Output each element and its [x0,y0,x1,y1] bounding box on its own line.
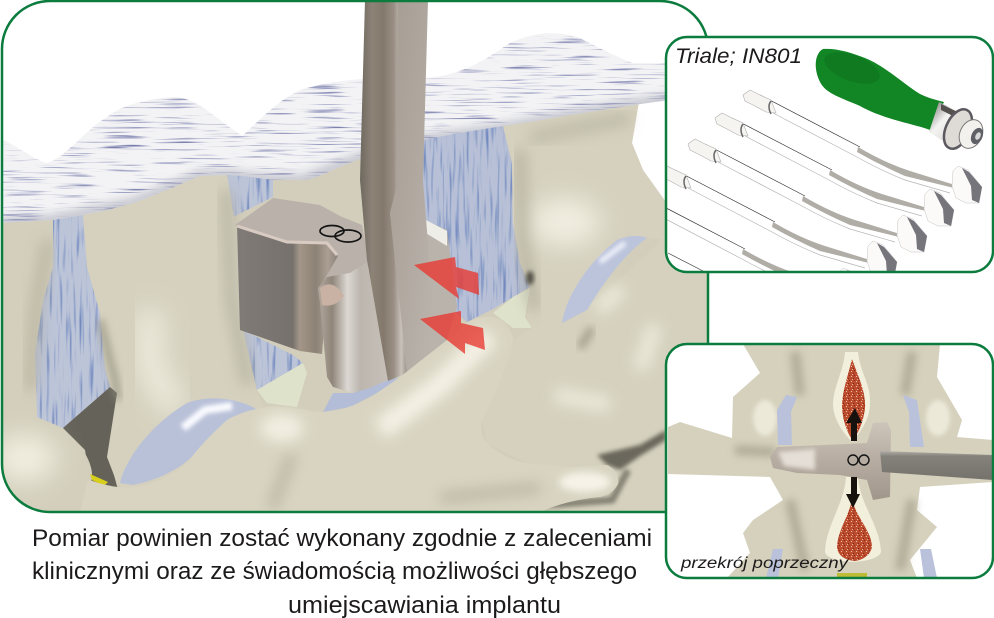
process highlight ridge [380,335,490,430]
green tissue right [493,288,532,328]
right pillar bone [503,95,668,330]
bone light knobs [753,400,777,436]
caption line 1: Pomiar powinien zostać wykonany zgodnie z zaleceniami [32,525,652,552]
blue disc lower left [120,398,258,485]
rod 5 [628,192,867,305]
blue disc top right [903,395,924,447]
vertebra bones [668,344,993,578]
main panel border [2,1,708,512]
instrument shaft right face [390,0,436,374]
corner highlight [320,284,344,306]
right notch shadow [526,271,534,285]
top cut section [833,352,870,442]
yellow fragment [90,474,108,486]
instrument shaft strip [360,0,407,381]
blue disc under implant [323,377,402,412]
inset border [666,344,993,578]
arrow down [846,477,860,508]
dark shadow below lower right bone [597,430,666,470]
caption text block [32,525,652,618]
left pillar bone [86,192,244,478]
marking 8 [320,226,361,242]
rod 2 [715,113,954,226]
inset label: Triale; IN801 [675,45,802,68]
blue disc top left [777,395,797,445]
knob highlight [0,434,57,482]
right pillar highlight [529,198,601,246]
caption line 2: klinicznymi oraz ze świadomością możliwości głębszego [32,558,637,585]
shading far left bone [30,240,48,390]
right top highlight [426,220,447,246]
trial implant [770,422,891,500]
rod 1 [743,90,982,203]
rear dark body [237,226,338,354]
disc highlight [183,406,232,428]
process body shade [272,455,540,508]
top edge highlight [237,226,337,255]
bone light knob right [926,400,950,436]
green tissue lower [257,363,307,407]
implant nose highlight [778,449,815,470]
far left bone with knob [36,269,92,480]
rod 4 [658,165,897,278]
panel: main anatomical view [0,0,708,512]
middle ligament pieces [225,170,305,395]
arrow up [846,408,862,441]
lower right highlights [555,288,655,405]
right lower bone [482,230,708,512]
yellow fragment [837,573,867,578]
inset border [666,37,993,272]
green handle [816,46,987,153]
blue disc bottom right [920,549,937,578]
red arrow upper [414,257,479,299]
chrome collar [929,102,972,150]
grey instrument bar [880,451,993,480]
bone shading [735,352,912,570]
bottom cut section [825,477,881,562]
dark recess lower left [63,387,120,490]
left ligament [35,215,110,428]
red arrow lower [420,311,485,354]
pillar shade left [100,320,118,400]
inset caption: przekrój poprzeczny [680,555,849,572]
right pillar top shade [530,118,630,138]
right side face [420,218,457,362]
panel: cross-section inset [666,344,993,578]
right pillar shade [520,150,535,310]
panel: instruments inset [628,37,993,305]
implant marking 8 [848,455,869,465]
front process bone [80,317,618,512]
blue disc right [562,236,647,323]
process highlight left knob [260,414,304,442]
rod 3 [688,139,927,252]
shadow below process [545,467,632,510]
top face [235,198,370,290]
blue disc bottom left [766,549,783,578]
implant block [235,198,457,393]
crease shadow lower right [580,328,592,348]
bone underpaint [35,104,664,511]
top spongy bone [842,359,865,441]
pillar highlight [150,310,175,410]
right ligament [418,125,533,325]
process end highlight [559,472,611,492]
rod 6 [668,253,705,272]
membrane across top [0,30,670,230]
front face [318,262,388,393]
disc right highlight [600,243,625,262]
bottom spongy bone [837,500,872,561]
pillar side shade right [226,190,248,385]
